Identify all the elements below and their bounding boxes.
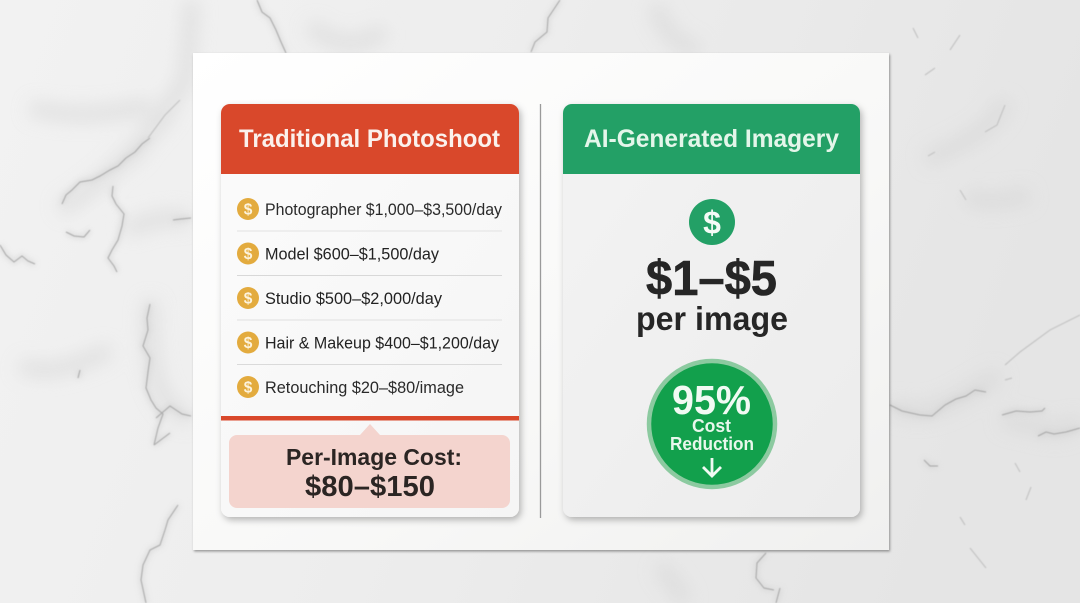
left card body <box>221 104 519 517</box>
cost item: retouching: Retouching $20–$80/image <box>265 379 464 397</box>
badge: 95 percent cost reduction: Cost <box>692 416 731 436</box>
paper sheet <box>193 53 889 550</box>
badge: 95 percent cost reduction <box>649 361 775 487</box>
cost item: model <box>237 242 440 264</box>
panel: traditional photoshoot <box>221 104 519 517</box>
left card heading: Traditional Photoshoot <box>239 125 501 153</box>
callout: per-image cost: Per-Image Cost: <box>286 444 462 470</box>
badge: 95 percent cost reduction: Reduction <box>670 434 754 454</box>
cost item: photographer: $ <box>244 202 253 218</box>
cost item: retouching: $ <box>244 380 253 396</box>
cost item: photographer: Photographer $1,000–$3,500/day <box>265 201 503 219</box>
icon: down arrow <box>703 458 721 476</box>
right card body <box>563 104 860 517</box>
icon: green dollar coin: $ <box>703 204 721 240</box>
cost item: studio: Studio $500–$2,000/day <box>265 290 443 308</box>
callout: per-image cost <box>229 424 510 508</box>
right card heading: AI-Generated Imagery <box>584 125 839 153</box>
left card heading <box>221 104 519 174</box>
price: one to five dollars: $1–$5 <box>646 252 777 306</box>
cost item: hair and makeup: $ <box>244 335 253 352</box>
cost item: studio: $ <box>244 290 253 308</box>
badge: 95 percent cost reduction: 95% <box>672 377 751 423</box>
price unit label: per image <box>636 301 788 338</box>
icon: green dollar coin <box>689 199 735 245</box>
panel: ai-generated imagery <box>563 104 860 517</box>
callout: per-image cost: $80–$150 <box>305 471 435 503</box>
cost item: model: $ <box>244 246 253 263</box>
cost item: model: Model $600–$1,500/day <box>265 246 440 264</box>
cost item: hair and makeup: Hair & Makeup $400–$1,200/day <box>265 334 500 352</box>
right card heading <box>563 104 860 174</box>
